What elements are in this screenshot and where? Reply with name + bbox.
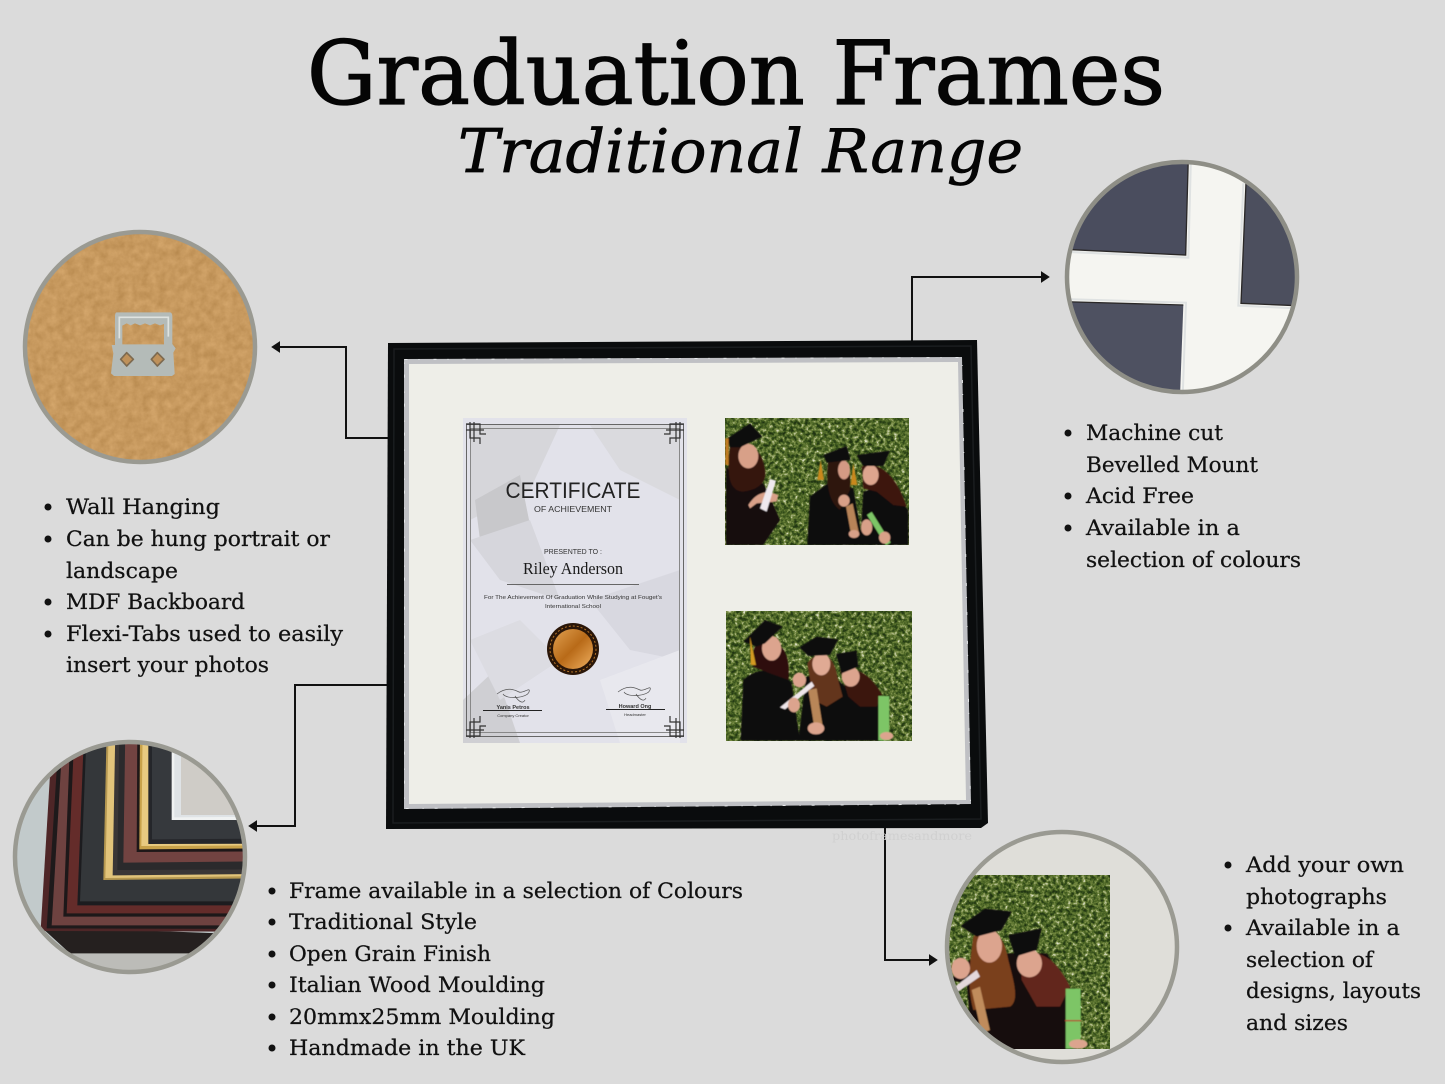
text block: mount features: Machine cut: [1086, 421, 1224, 445]
text block: backboard features: landscape: [66, 559, 178, 583]
text block: mount features: [1064, 421, 1301, 572]
certificate recipient: PRESENTED TO :: [544, 549, 602, 556]
certificate border: [466, 424, 684, 736]
text block: moulding features: Open Grain Finish: [289, 942, 491, 966]
text block: moulding features: Handmade in the UK: [289, 1036, 525, 1060]
certificate citation: For The Achievement Of Graduation While Studying at Fouget's: [484, 595, 662, 601]
certificate signature right: Howard Ong: [619, 704, 651, 710]
text block: backboard features: insert your photos: [66, 653, 269, 677]
text block: mount features: Available in a: [1085, 516, 1240, 540]
certificate: International School: [545, 604, 601, 610]
text block: moulding features: Traditional Style: [289, 910, 477, 934]
text block: moulding features: 20mmx25mm Moulding: [289, 1005, 555, 1029]
text block: moulding features: Italian Wood Moulding: [289, 973, 545, 997]
certificate: [463, 418, 687, 743]
arrow: frame to backboard detail: [273, 343, 388, 438]
picture frame: [386, 340, 988, 829]
mount board: [409, 362, 966, 804]
certificate: Riley Anderson: [523, 559, 623, 578]
certificate medal: [547, 623, 599, 675]
text block: backboard features: MDF Backboard: [66, 590, 245, 614]
photo: three graduates, top: [725, 418, 909, 545]
certificate signature right: Headmaster: [624, 712, 647, 717]
text block: photo features: Available in a: [1245, 916, 1400, 940]
icon: photo close-up detail circle: [940, 825, 1185, 1070]
text block: backboard features: [44, 495, 343, 677]
text block: photo features: selection of: [1246, 948, 1375, 972]
text block: backboard features: Can be hung portrait or: [66, 527, 331, 551]
text block: backboard features: Flexi-Tabs used to easily: [66, 622, 343, 646]
arrow: frame to moulding detail: [250, 685, 387, 830]
text block: photo features: and sizes: [1246, 1011, 1348, 1035]
text block: photo features: [1224, 853, 1421, 1035]
certificate: OF ACHIEVEMENT: [534, 505, 612, 514]
text block: mount features: Bevelled Mount: [1086, 453, 1259, 477]
certificate signature right: [606, 687, 665, 717]
arrow: frame to photo detail: [885, 828, 936, 964]
icon: sawtooth hanger: [111, 312, 176, 376]
certificate signature left: Yanis Petros: [496, 705, 530, 711]
icon: bevelled mount detail circle: [1060, 155, 1305, 400]
icon: moulding colours detail circle: [12, 740, 248, 974]
text block: photo features: Add your own: [1245, 853, 1404, 877]
text block: photo features: photographs: [1246, 885, 1387, 909]
subtitle: Traditional Range: [458, 117, 1023, 187]
text block: mount features: Acid Free: [1085, 484, 1194, 508]
arrow: frame to mount detail: [912, 273, 1048, 341]
text block: moulding features: Frame available in a selection of Colours: [289, 879, 743, 903]
photo: three graduates, bottom: [720, 610, 920, 743]
certificate heading: CERTIFICATE: [506, 478, 640, 503]
certificate corner knots: [466, 422, 684, 738]
text block: moulding features: [268, 879, 743, 1060]
icon: backboard detail circle: [20, 228, 260, 468]
certificate signature left: Company Creator: [497, 713, 529, 718]
certificate signature left: [483, 689, 542, 718]
text block: mount features: selection of colours: [1086, 548, 1301, 572]
text block: backboard features: Wall Hanging: [66, 495, 220, 519]
title: Graduation Frames: [307, 22, 1165, 125]
text block: photo features: designs, layouts: [1246, 979, 1421, 1003]
watermark: photoframesandmore: [832, 828, 972, 843]
